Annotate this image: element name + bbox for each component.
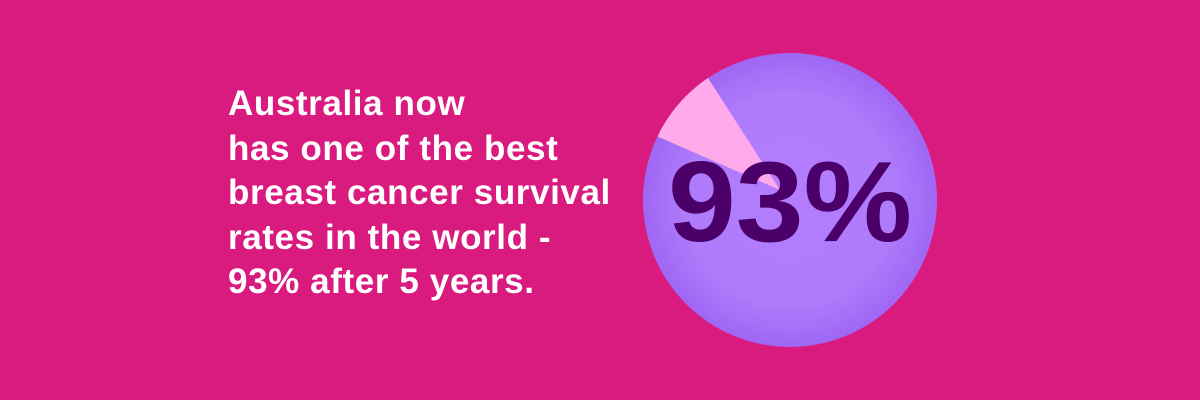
big percentage: 93% [668, 139, 912, 266]
headline text: rates in the world - [228, 218, 551, 256]
pink 7% slice [658, 78, 780, 190]
headline text: Australia now [228, 84, 465, 123]
pie chart [643, 53, 937, 347]
headline text [228, 84, 611, 301]
headline text: 93% after 5 years. [228, 262, 535, 301]
headline text: has one of the best [228, 128, 558, 168]
headline text: breast cancer survival [228, 173, 611, 212]
